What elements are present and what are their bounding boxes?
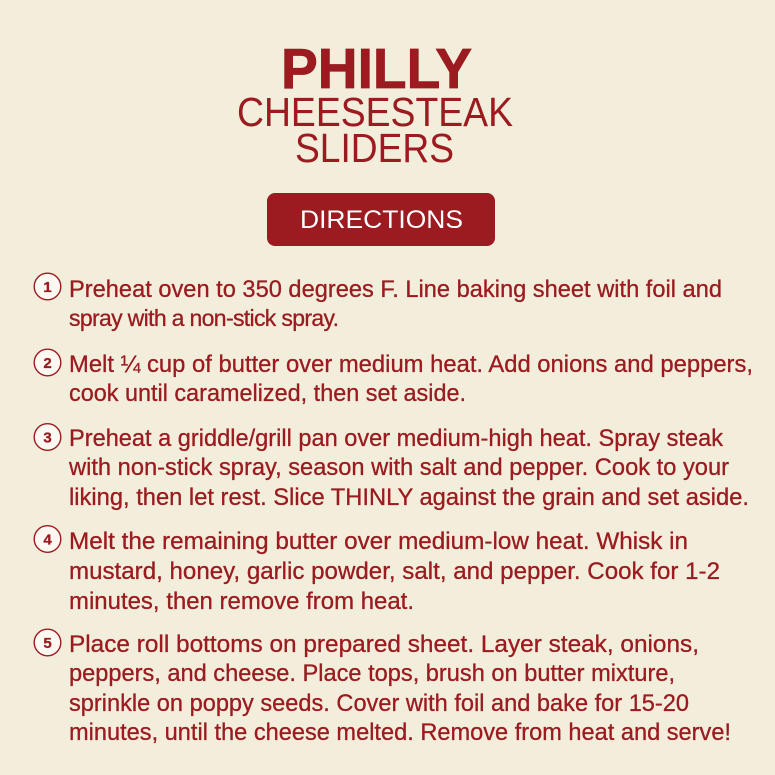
step 2 <box>34 349 753 407</box>
number badge 2 <box>34 349 61 376</box>
step 5 text: peppers, and cheese. Place tops, brush on butter mixture, <box>69 660 675 687</box>
title: CHEESESTEAK <box>237 89 513 135</box>
step 3 text: Preheat a griddle/grill pan over medium-high heat. Spray steak <box>69 425 724 452</box>
step 1 text <box>69 276 722 331</box>
title: PHILLY <box>281 37 472 101</box>
step 3 text: with non-stick spray, season with salt and pepper. Cook to your <box>68 454 729 481</box>
directions button: DIRECTIONS <box>300 206 463 234</box>
directions button <box>267 193 495 246</box>
step 5 text: minutes, until the cheese melted. Remove from heat and serve! <box>69 719 731 746</box>
step 3 <box>34 424 749 511</box>
step 4 <box>34 526 720 615</box>
step 4 text: mustard, honey, garlic powder, salt, and pepper. Cook for 1-2 <box>69 558 720 585</box>
step 1 <box>34 273 722 331</box>
step 2 text: Melt ¼ cup of butter over medium heat. Add onions and peppers, <box>69 351 753 378</box>
number badge 4: 4 <box>43 532 52 548</box>
step 4 text: minutes, then remove from heat. <box>69 588 414 615</box>
step 4 text <box>69 528 720 615</box>
step 3 text: liking, then let rest. Slice THINLY against the grain and set aside. <box>69 484 749 511</box>
number badge 5: 5 <box>43 635 52 652</box>
number badge 1: 1 <box>43 279 52 296</box>
number badge 1 <box>34 273 61 300</box>
step 4 text: Melt the remaining butter over medium-low heat. Whisk in <box>69 528 688 555</box>
number badge 3 <box>34 424 61 450</box>
title <box>237 37 513 171</box>
step 5 <box>34 629 731 746</box>
step 2 text <box>69 351 753 407</box>
title: SLIDERS <box>295 125 454 171</box>
number badge 4 <box>34 526 61 552</box>
step 5 text: Place roll bottoms on prepared sheet. Layer steak, onions, <box>69 631 699 658</box>
number badge 2: 2 <box>43 355 52 372</box>
number badge 5 <box>34 629 61 656</box>
step 1 text: spray with a non-stick spray. <box>69 305 339 331</box>
step 2 text: cook until caramelized, then set aside. <box>69 380 466 407</box>
step 5 text: sprinkle on poppy seeds. Cover with foil and bake for 15-20 <box>69 690 689 717</box>
step 1 text: Preheat oven to 350 degrees F. Line baking sheet with foil and <box>69 276 722 303</box>
number badge 3: 3 <box>43 430 52 446</box>
step 3 text <box>68 425 749 511</box>
step 5 text <box>69 631 731 746</box>
